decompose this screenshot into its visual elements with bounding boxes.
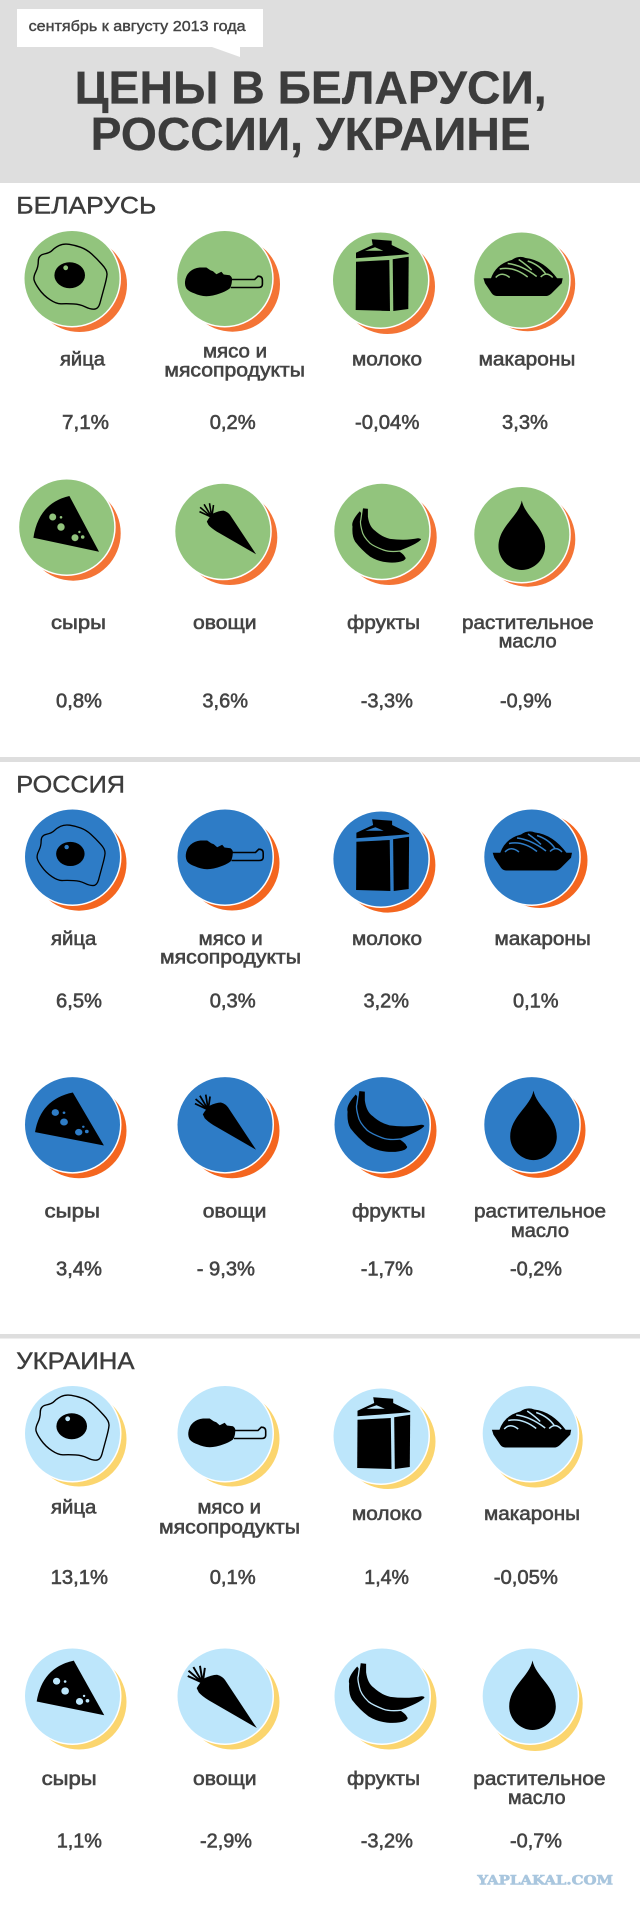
value: 3,6% bbox=[202, 690, 248, 713]
disc bbox=[483, 1076, 586, 1178]
watermark: YAPLAKAL.COM bbox=[476, 1874, 613, 1888]
item: pasta bbox=[473, 231, 575, 434]
label: фрукты bbox=[352, 1201, 426, 1223]
icon: banana bbox=[349, 1662, 425, 1723]
icon: milk carton bbox=[357, 1397, 410, 1469]
value: 1,1% bbox=[57, 1830, 102, 1853]
disc bbox=[18, 478, 121, 581]
value: -0,2% bbox=[510, 1257, 562, 1280]
item: cheese bbox=[18, 478, 121, 713]
item: meat bbox=[160, 808, 301, 1013]
disc bbox=[332, 810, 435, 913]
disc bbox=[481, 1647, 583, 1751]
item: vegetable oil bbox=[462, 486, 594, 713]
label: растительное bbox=[462, 612, 594, 634]
value: 13,1% bbox=[51, 1566, 108, 1589]
title bbox=[75, 62, 547, 160]
icon: oil drop bbox=[509, 1660, 556, 1730]
label: масло bbox=[499, 630, 557, 652]
value: -1,7% bbox=[361, 1257, 413, 1280]
panel: Ukraine bbox=[16, 1348, 606, 1853]
item: meat bbox=[164, 230, 305, 434]
icon: egg bbox=[37, 825, 105, 886]
disc bbox=[176, 808, 280, 910]
disc bbox=[24, 1384, 126, 1486]
item: milk bbox=[332, 1387, 436, 1589]
item: vegetables bbox=[176, 1076, 280, 1280]
item: vegetable oil bbox=[473, 1647, 606, 1853]
label bbox=[164, 340, 305, 382]
heading: Belarus: БЕЛАРУСЬ bbox=[16, 192, 156, 220]
value: 3,2% bbox=[364, 990, 409, 1013]
value: 3,3% bbox=[502, 411, 548, 434]
disc bbox=[333, 482, 437, 585]
disc bbox=[332, 1387, 436, 1489]
label: мясо и bbox=[203, 340, 267, 362]
icon: meat bbox=[188, 1418, 266, 1447]
item: cheese bbox=[24, 1076, 126, 1280]
disc bbox=[176, 1384, 280, 1486]
disc bbox=[176, 1647, 280, 1750]
value: -0,7% bbox=[510, 1830, 562, 1853]
label bbox=[473, 1768, 606, 1809]
disc bbox=[24, 1076, 126, 1178]
value: -2,9% bbox=[200, 1830, 252, 1853]
icon: egg bbox=[36, 1395, 109, 1460]
disc bbox=[24, 1647, 126, 1750]
item: vegetables bbox=[176, 1647, 280, 1853]
icon: carrot bbox=[188, 1666, 257, 1728]
label: овощи bbox=[193, 1768, 257, 1790]
disc bbox=[333, 1647, 436, 1750]
label: растительное bbox=[473, 1768, 606, 1790]
label: сыры bbox=[42, 1768, 97, 1790]
label: масло bbox=[508, 1787, 566, 1809]
icon: pasta bowl bbox=[483, 257, 563, 296]
header band bbox=[0, 0, 640, 183]
icon: meat bbox=[185, 268, 262, 296]
value: - 9,3% bbox=[197, 1257, 255, 1280]
label: фрукты bbox=[347, 1768, 420, 1790]
label: мясопродукты bbox=[160, 946, 301, 968]
value: -3,3% bbox=[361, 690, 413, 713]
icon: pasta bowl bbox=[492, 1408, 571, 1448]
icon: oil drop bbox=[498, 500, 545, 570]
label: яйца bbox=[60, 349, 105, 371]
label: фрукты bbox=[347, 612, 420, 634]
label bbox=[462, 612, 594, 652]
label: сыры bbox=[51, 612, 106, 634]
panel: Belarus bbox=[16, 192, 594, 713]
icon: oil drop bbox=[510, 1091, 557, 1160]
label: мясо и bbox=[198, 1496, 261, 1518]
disc bbox=[24, 808, 126, 911]
disc bbox=[174, 482, 277, 585]
value: 7,1% bbox=[62, 411, 109, 434]
icon: banana bbox=[347, 1090, 425, 1152]
title: ЦЕНЫ В БЕЛАРУСИ, bbox=[75, 62, 547, 114]
label: молоко bbox=[352, 928, 422, 950]
label bbox=[160, 928, 301, 968]
title: РОССИИ, УКРАИНЕ bbox=[91, 108, 531, 160]
callout: period: сентябрь к августу 2013 года bbox=[29, 18, 246, 35]
value: -0,9% bbox=[500, 690, 552, 713]
label: овощи bbox=[203, 1201, 266, 1223]
icon: carrot bbox=[195, 1095, 256, 1150]
panel: Russia bbox=[16, 771, 606, 1280]
icon: carrot bbox=[200, 503, 256, 554]
item: milk bbox=[332, 231, 435, 434]
icon: egg bbox=[34, 244, 107, 309]
disc bbox=[176, 230, 280, 332]
item: vegetable oil bbox=[474, 1076, 606, 1280]
label: мясо и bbox=[199, 928, 263, 950]
value: 6,5% bbox=[56, 990, 102, 1013]
value: 0,1% bbox=[210, 1566, 256, 1589]
callout: period bbox=[17, 9, 263, 57]
item: pasta bbox=[483, 808, 591, 1013]
value: 0,1% bbox=[513, 990, 559, 1013]
heading: Russia: РОССИЯ bbox=[16, 771, 125, 798]
item: milk bbox=[332, 810, 435, 1013]
item: fruit bbox=[333, 1647, 436, 1853]
item: fruit bbox=[333, 482, 437, 713]
icon: cheese bbox=[35, 1093, 104, 1145]
item: eggs bbox=[23, 230, 127, 434]
value: 1,4% bbox=[364, 1566, 409, 1589]
item: eggs bbox=[24, 808, 126, 1013]
value: -0,05% bbox=[494, 1566, 558, 1589]
label: яйца bbox=[51, 928, 96, 950]
disc bbox=[473, 231, 575, 331]
value: 0,2% bbox=[210, 411, 256, 434]
item: vegetables bbox=[174, 482, 277, 713]
heading: Ukraine: УКРАИНА bbox=[16, 1348, 135, 1375]
label: яйца bbox=[51, 1496, 96, 1518]
item: cheese bbox=[24, 1647, 126, 1853]
value: 3,4% bbox=[56, 1257, 102, 1280]
label: макароны bbox=[494, 928, 591, 950]
label: сыры bbox=[44, 1201, 100, 1223]
label: масло bbox=[511, 1220, 569, 1242]
disc bbox=[333, 1076, 436, 1178]
value: -0,04% bbox=[355, 411, 419, 434]
label: мясопродукты bbox=[164, 360, 305, 382]
label: макароны bbox=[479, 349, 575, 371]
icon: cheese bbox=[37, 1661, 104, 1715]
disc bbox=[23, 230, 127, 332]
icon: cheese bbox=[33, 496, 99, 552]
item: eggs bbox=[24, 1384, 126, 1589]
icon: milk carton bbox=[356, 239, 409, 311]
icon: meat bbox=[186, 840, 263, 869]
disc bbox=[332, 231, 435, 334]
label: овощи bbox=[193, 612, 257, 634]
value: -3,2% bbox=[361, 1830, 413, 1853]
disc bbox=[473, 486, 575, 587]
label: растительное bbox=[474, 1201, 606, 1223]
value: 0,8% bbox=[56, 690, 102, 713]
value: 0,3% bbox=[210, 990, 256, 1013]
item: meat bbox=[159, 1384, 300, 1589]
label: мясопродукты bbox=[159, 1516, 300, 1538]
icon: pasta bowl bbox=[493, 831, 572, 870]
label bbox=[474, 1201, 606, 1242]
disc bbox=[481, 1384, 583, 1488]
item: fruit bbox=[333, 1076, 436, 1280]
disc bbox=[483, 808, 588, 908]
label: макароны bbox=[484, 1503, 580, 1525]
item: pasta bbox=[481, 1384, 583, 1589]
disc bbox=[176, 1076, 280, 1178]
label bbox=[159, 1496, 300, 1538]
icon: milk carton bbox=[356, 819, 409, 891]
icon: banana bbox=[352, 508, 422, 563]
label: молоко bbox=[352, 1503, 422, 1525]
label: молоко bbox=[352, 349, 422, 371]
